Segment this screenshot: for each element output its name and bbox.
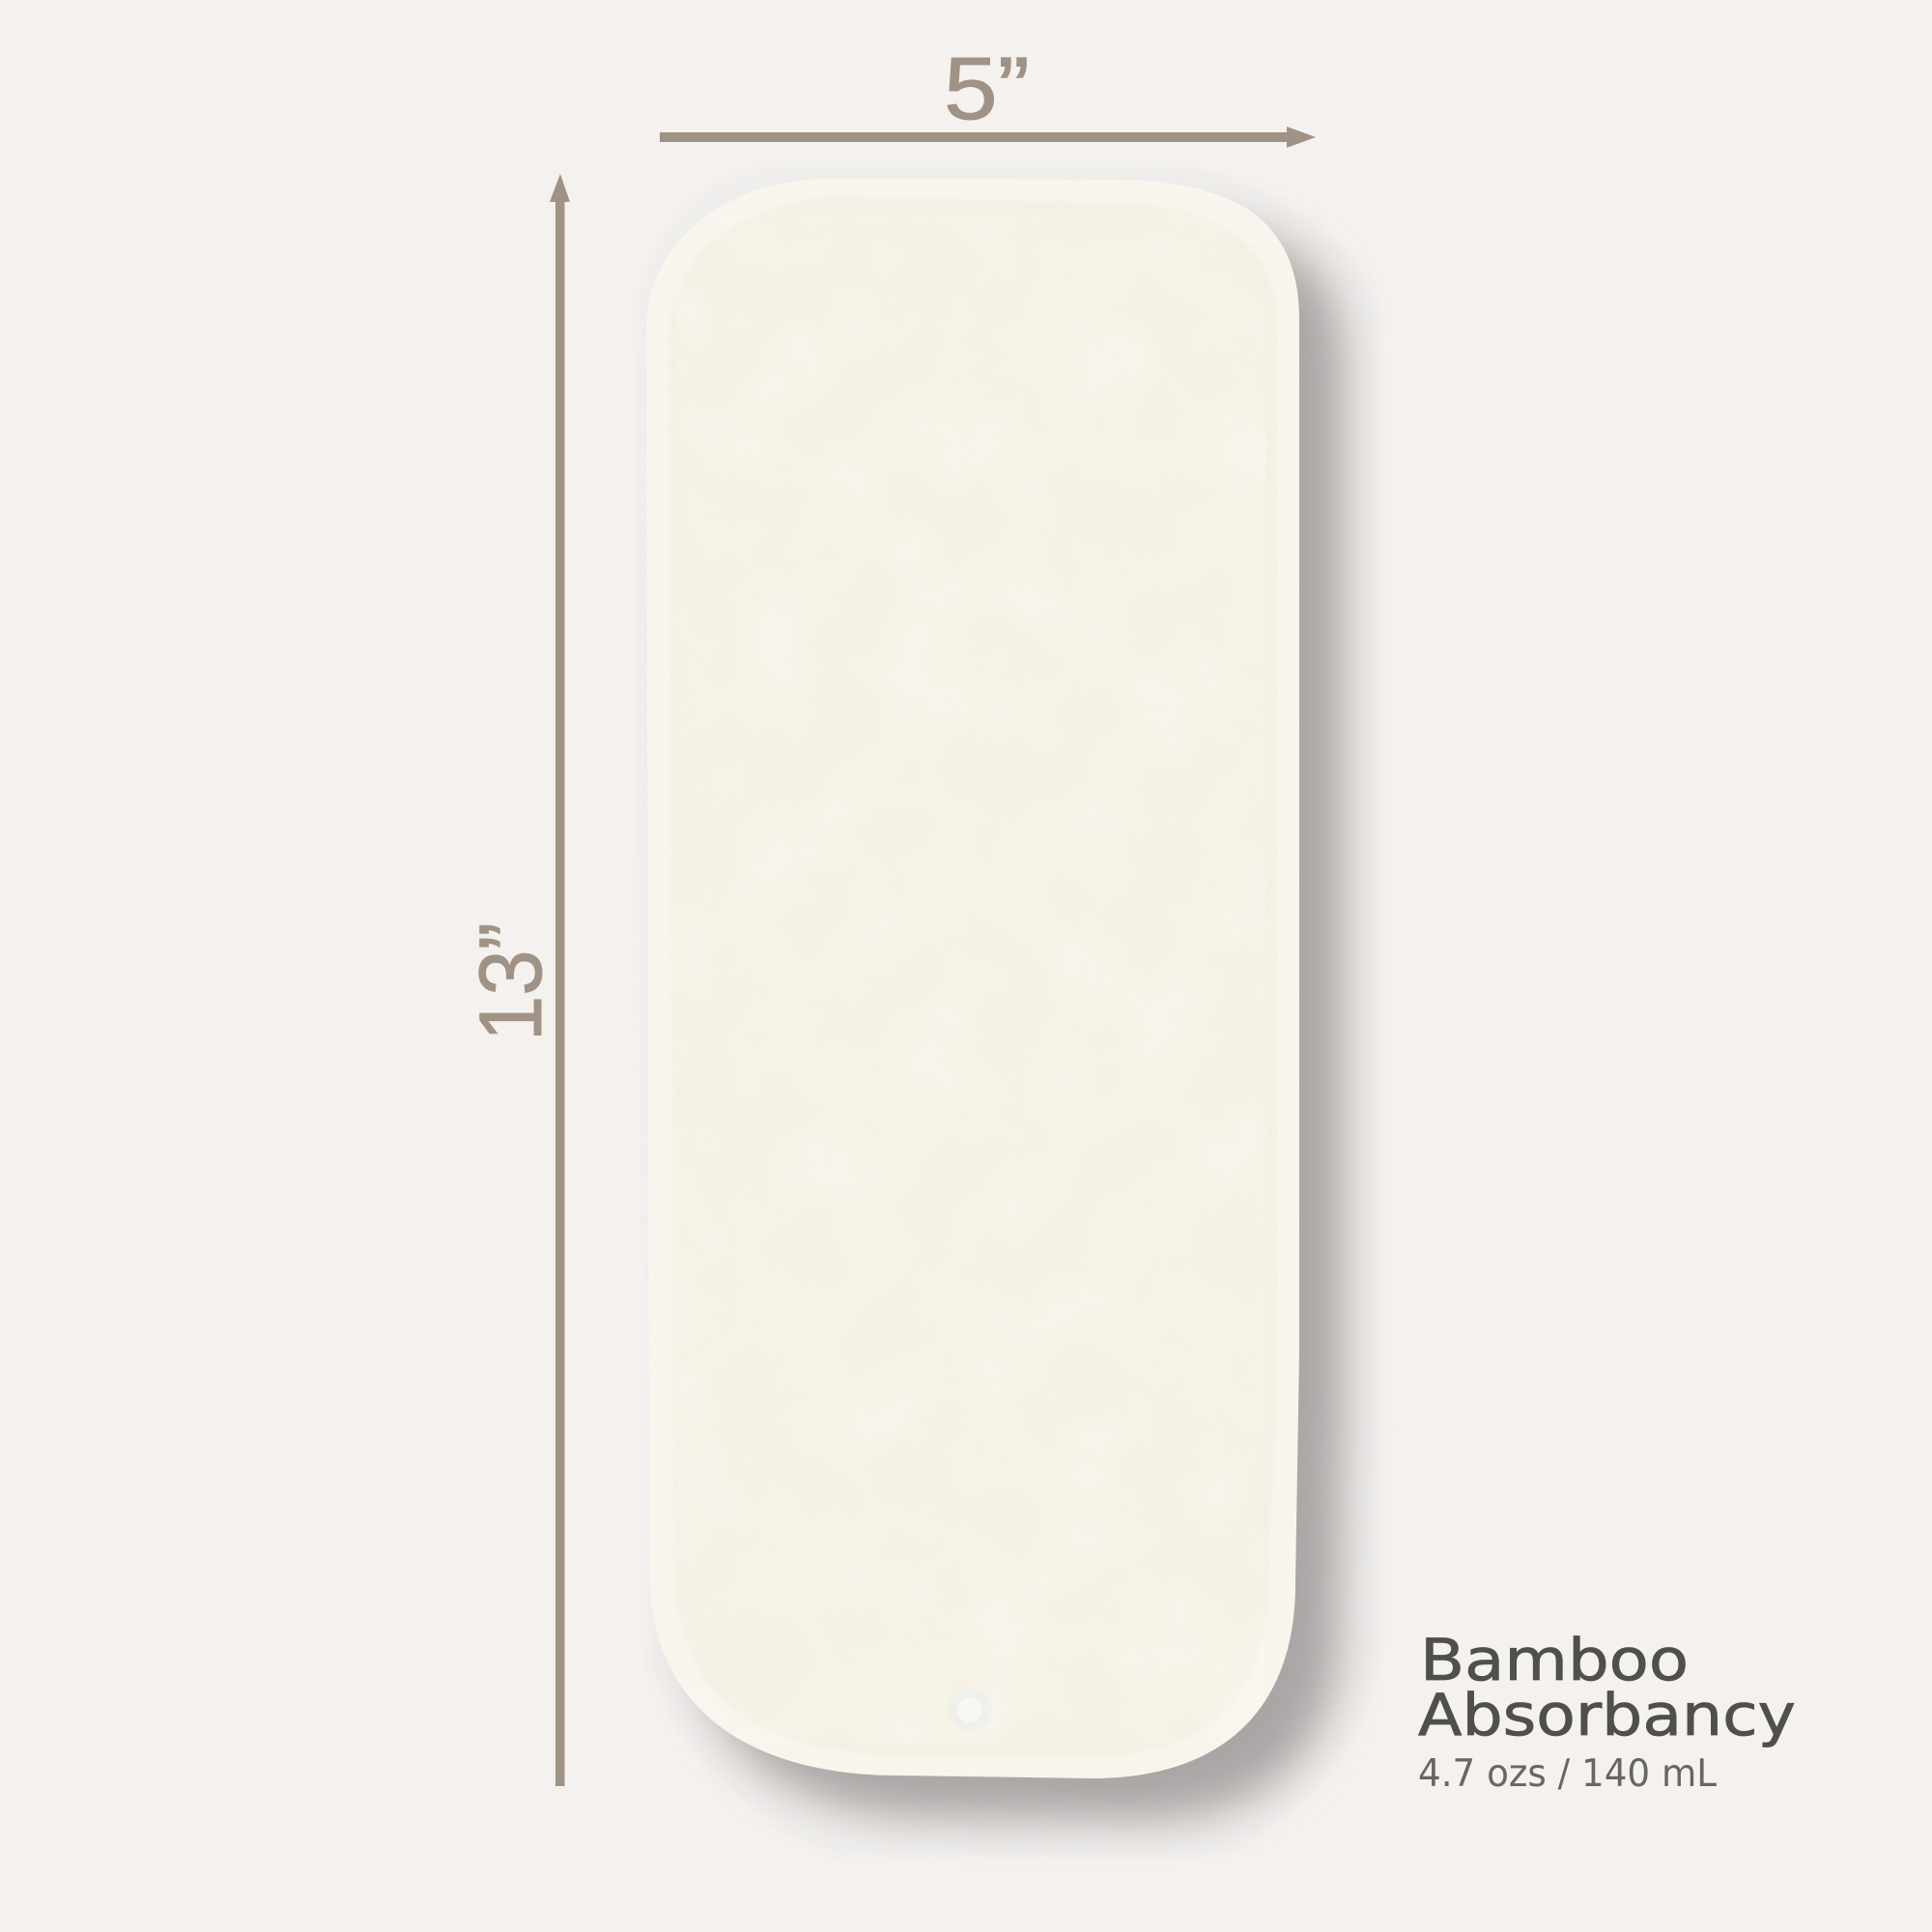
width label: 5” xyxy=(944,40,1030,138)
fabric grain xyxy=(642,174,1304,1782)
height label: 13” xyxy=(462,923,560,1041)
pad shadow xyxy=(636,166,1378,1855)
bamboo insert pad xyxy=(638,169,1309,1787)
caption heading xyxy=(1418,1627,1796,1749)
caption capacity: 4.7 ozs / 140 mL xyxy=(1418,1752,1717,1796)
snap button xyxy=(948,1689,992,1731)
height arrow xyxy=(550,174,570,1786)
pad inner fabric xyxy=(669,197,1278,1758)
caption heading: Absorbancy xyxy=(1418,1682,1796,1749)
fabric mottled texture xyxy=(676,213,1265,1744)
pad fabric edge xyxy=(638,169,1309,1787)
caption heading: Bamboo xyxy=(1420,1627,1689,1694)
width arrow xyxy=(660,127,1316,148)
